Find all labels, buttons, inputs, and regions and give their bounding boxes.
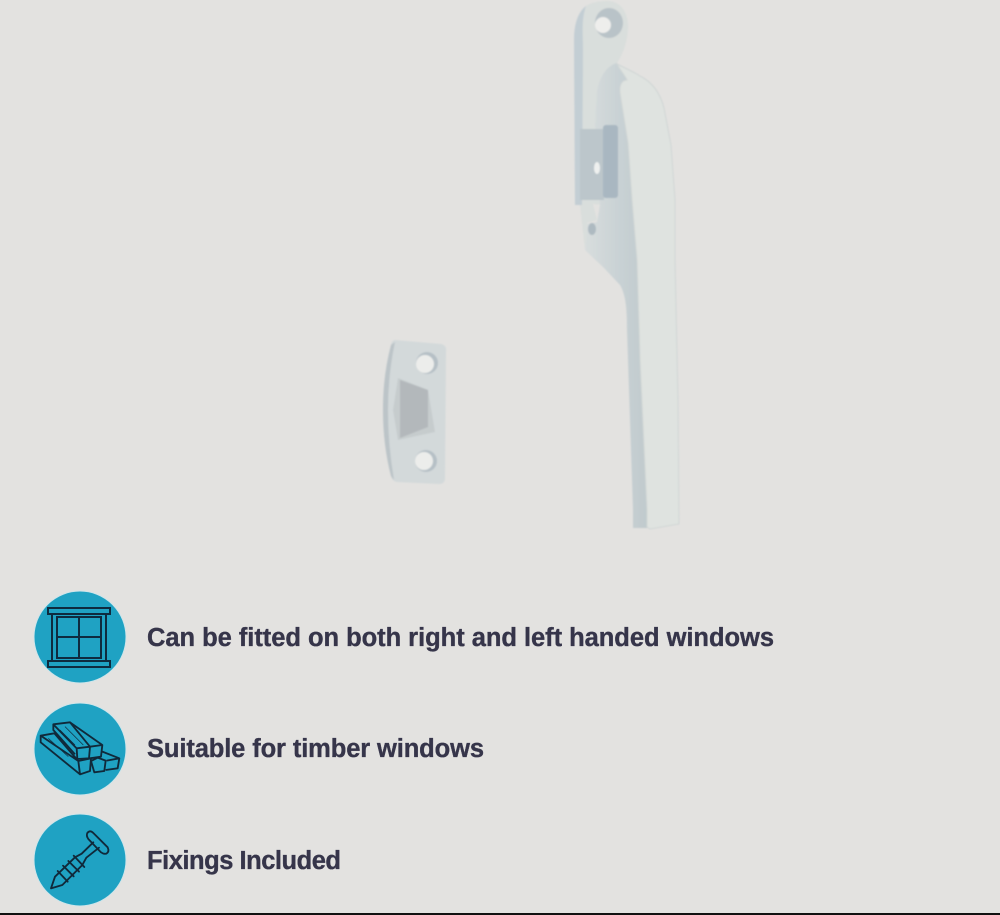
keeper upper hole: [416, 352, 438, 374]
handle front face: [617, 64, 679, 529]
catch hole: [594, 162, 600, 174]
catch housing: [580, 129, 604, 200]
text: fixings: Fixings Included: [147, 847, 341, 875]
keeper left bevel: [383, 342, 395, 480]
slot: [603, 125, 618, 198]
icon: screw: [34, 814, 126, 906]
keeper recess: [400, 380, 428, 438]
text: fitting: Can be fitted on both right and left handed windows: [147, 624, 774, 652]
product: window handle: [574, 1, 679, 529]
icon: window: [34, 591, 126, 683]
keeper recess bevel: [393, 378, 435, 440]
keeper lower hole: [415, 450, 437, 472]
plate left edge: [574, 6, 586, 205]
feature row: fixings: [34, 814, 341, 906]
handle back plate: [574, 1, 628, 250]
icon: timber beams: [34, 703, 126, 795]
keeper outline: [383, 340, 446, 484]
feature row: window: [34, 591, 774, 683]
feature row: timber: [34, 703, 484, 795]
lower fixing hole: [588, 223, 596, 235]
product: keeper plate: [383, 340, 446, 484]
handle body side: [585, 63, 650, 528]
mounting eye hole: [595, 8, 623, 38]
text: timber: Suitable for timber windows: [147, 735, 484, 763]
